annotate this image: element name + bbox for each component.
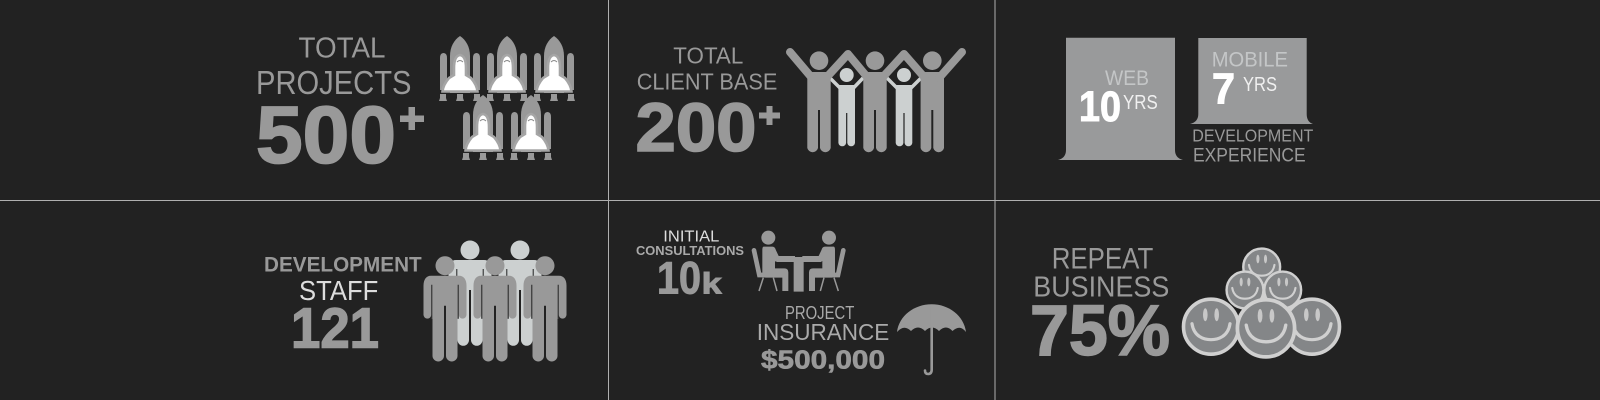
heading: project insurance: INSURANCE: [757, 319, 889, 345]
box: web: 10: [1079, 83, 1121, 131]
number: 200+: 200: [636, 89, 756, 166]
heading: total projects: TOTAL: [298, 33, 386, 65]
number: 10k: k: [702, 267, 722, 300]
heading: total client base: [637, 42, 777, 94]
box: web: [1058, 38, 1183, 160]
panel: development experience: [1058, 38, 1314, 167]
icon: team of people: [424, 240, 566, 361]
box: mobile: [1190, 38, 1313, 124]
heading: project insurance: PROJECT: [785, 303, 854, 323]
heading: project insurance: [757, 303, 889, 345]
heading: total projects: PROJECTS: [256, 65, 412, 102]
icon: smiley pile: [1184, 249, 1340, 357]
caption: development experience: EXPERIENCE: [1193, 145, 1306, 167]
heading: initial consultations: CONSULTATIONS: [636, 244, 744, 258]
panel: total client base: [636, 42, 962, 166]
heading: initial consultations: [636, 229, 744, 258]
heading: total client base: TOTAL: [673, 42, 743, 68]
number: 10k: 10: [657, 252, 701, 303]
box: mobile: YRS: [1243, 74, 1277, 96]
icon: meeting at table: [754, 231, 843, 292]
box: mobile: MOBILE: [1212, 49, 1288, 72]
number: 75%: 75%: [1030, 292, 1170, 371]
box: web: WEB: [1105, 67, 1149, 90]
heading: initial consultations: INITIAL: [663, 229, 719, 246]
number: $500,000: $500,000: [761, 344, 885, 374]
heading: repeat business: BUSINESS: [1033, 272, 1169, 304]
number: 500+: 500: [256, 90, 396, 180]
box: web: YRS: [1123, 92, 1158, 114]
caption: development experience: [1192, 126, 1314, 167]
icon: umbrella: [897, 304, 966, 374]
panel: repeat business: [1030, 242, 1340, 371]
heading: development staff: DEVELOPMENT: [264, 254, 422, 277]
panel: total projects: [256, 33, 575, 181]
panel: consultations and insurance: [636, 229, 966, 374]
heading: repeat business: REPEAT: [1052, 242, 1153, 275]
number: 121: 121: [291, 297, 379, 361]
heading: repeat business: [1033, 242, 1169, 304]
heading: total projects: [256, 33, 412, 102]
heading: total client base: CLIENT BASE: [637, 68, 777, 94]
heading: development staff: [264, 254, 422, 306]
box: mobile: 7: [1212, 64, 1235, 113]
panel: development staff: [264, 240, 566, 361]
icon: people with raised arms: [790, 51, 962, 152]
icon: rockets: [439, 36, 575, 160]
caption: development experience: DEVELOPMENT: [1192, 126, 1314, 146]
heading: development staff: STAFF: [299, 275, 378, 306]
